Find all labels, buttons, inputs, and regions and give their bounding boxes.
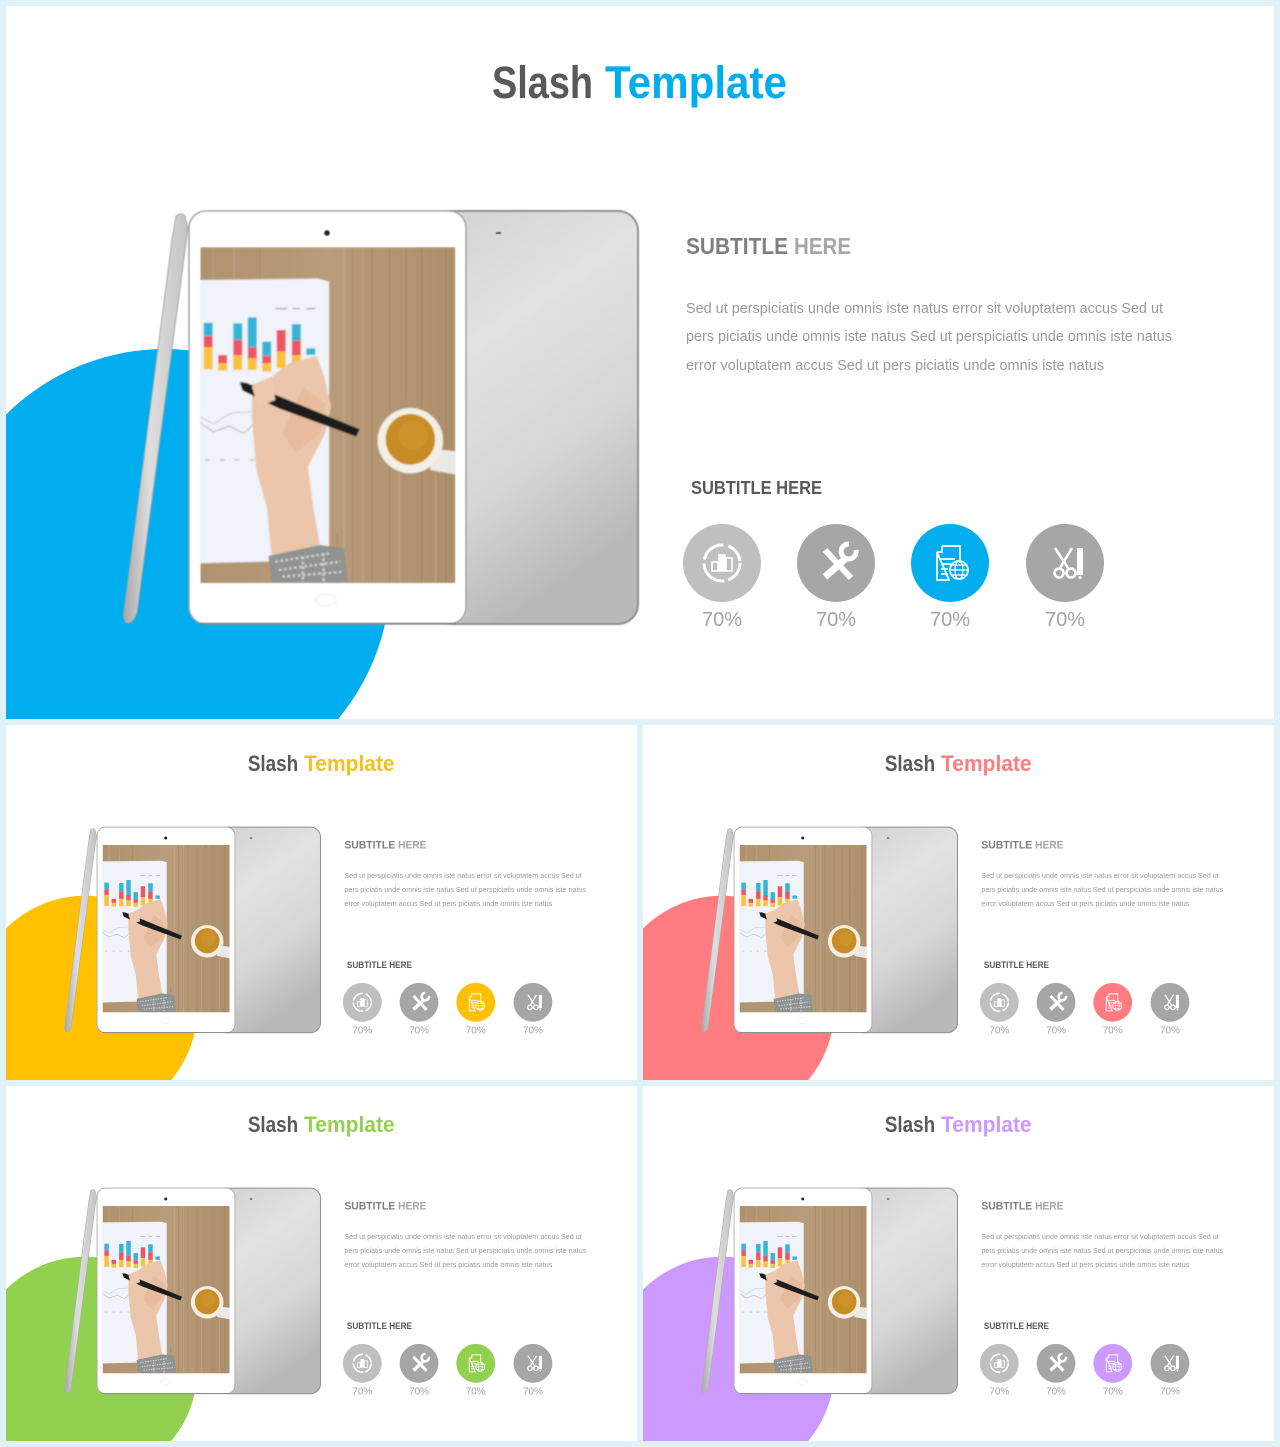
title: Template [941,751,1032,776]
body text: error voluptatem accus Sed ut pers piciatis unde omnis iste natus [344,1260,553,1269]
body text: Sed ut perspiciatis unde omnis iste natus error sit voluptatem accus Sed ut [344,1232,583,1241]
second subtitle: SUBTITLE HERE [691,478,822,498]
icon: tools 70%: 70% [409,1387,429,1398]
title [885,751,1032,776]
body text: Sed ut perspiciatis unde omnis iste natus error sit voluptatem accus Sed ut [686,300,1164,317]
icon: document 70% [1093,983,1132,1037]
title: Slash [885,1112,935,1137]
icon: scissors 70% [1151,983,1189,1037]
icon: tools 70% [400,983,438,1037]
icon: chart 70%: 70% [989,1026,1009,1037]
body text: pers piciatis unde omnis iste natus Sed ut perspiciatis unde omnis iste natus [344,885,586,894]
icon: document 70%: 70% [466,1026,486,1037]
subtitle heading: HERE [398,839,427,851]
subtitle heading: SUBTITLE [686,233,788,259]
title: Template [304,1112,395,1137]
body text [344,1232,586,1269]
body text [981,1232,1223,1269]
icon: scissors 70% [514,1344,552,1398]
icon: chart 70% [683,524,761,631]
body text [344,871,586,908]
body text: error voluptatem accus Sed ut pers piciatis unde omnis iste natus [686,357,1104,374]
subtitle heading: HERE [794,233,851,259]
body text: error voluptatem accus Sed ut pers piciatis unde omnis iste natus [981,899,1190,908]
icon: scissors 70% [1151,1344,1189,1398]
title: Template [605,57,787,108]
subtitle heading: HERE [398,1200,427,1212]
body text: pers piciatis unde omnis iste natus Sed ut perspiciatis unde omnis iste natus [686,328,1172,345]
icon: chart 70%: 70% [702,609,742,631]
subtitle heading [981,1200,1064,1212]
body text: pers piciatis unde omnis iste natus Sed ut perspiciatis unde omnis iste natus [344,1246,586,1255]
icon: document 70%: 70% [930,609,970,631]
body text [981,871,1223,908]
subtitle heading [686,233,851,259]
icon: scissors 70% [514,983,552,1037]
tablet mockup [65,827,320,1033]
blue circle shape [6,349,385,719]
panel: slide purple [610,1086,1274,1447]
icon: scissors 70%: 70% [523,1026,543,1037]
title: Slash [885,751,935,776]
subtitle heading: SUBTITLE [981,1200,1032,1212]
tablet mockup with chart photo [124,211,638,624]
icon: document 70% [911,524,989,631]
title [492,57,787,108]
body text: Sed ut perspiciatis unde omnis iste natus error sit voluptatem accus Sed ut [981,871,1220,880]
icon: tools 70%: 70% [1046,1026,1066,1037]
icon: chart 70%: 70% [352,1387,372,1398]
icon: chart 70% [980,983,1019,1037]
title: Slash [248,751,298,776]
coral circle shape [643,896,832,1080]
second subtitle: SUBTITLE HERE [347,1321,412,1331]
title [248,751,395,776]
icon: tools 70%: 70% [1046,1387,1066,1398]
second subtitle: SUBTITLE HERE [347,960,412,970]
icon: scissors 70%: 70% [523,1387,543,1398]
icon: scissors 70%: 70% [1160,1026,1180,1037]
body text: error voluptatem accus Sed ut pers piciatis unde omnis iste natus [344,899,553,908]
second subtitle: SUBTITLE HERE [984,1321,1049,1331]
subtitle heading [981,839,1064,851]
icon: document 70% [1093,1344,1132,1398]
icon: chart 70%: 70% [989,1387,1009,1398]
purple circle shape [643,1256,832,1441]
icon: document 70% [456,983,495,1037]
subtitle heading: SUBTITLE [344,1200,395,1212]
icon: tools 70% [1037,983,1075,1037]
subtitle heading [344,839,427,851]
subtitle heading: SUBTITLE [981,839,1032,851]
icon: document 70% [456,1344,495,1398]
title: Slash [492,57,593,108]
icon: scissors 70%: 70% [1045,609,1085,631]
body text: error voluptatem accus Sed ut pers piciatis unde omnis iste natus [981,1260,1190,1269]
body text: Sed ut perspiciatis unde omnis iste natus error sit voluptatem accus Sed ut [344,871,583,880]
icon: chart 70% [343,983,382,1037]
icon: tools 70% [797,524,875,631]
title: Template [941,1112,1032,1137]
panel: slide yellow [6,725,637,1080]
subtitle heading: HERE [1035,1200,1064,1212]
body text: pers piciatis unde omnis iste natus Sed ut perspiciatis unde omnis iste natus [981,1246,1223,1255]
panel: slide coral [643,725,1274,1080]
icon: tools 70%: 70% [409,1026,429,1037]
body text [686,300,1172,374]
icon: document 70%: 70% [466,1387,486,1398]
panel: main slide blue [6,6,1274,719]
title [248,1112,395,1137]
icon: scissors 70% [1026,524,1104,631]
icon: document 70%: 70% [1103,1026,1123,1037]
icon: chart 70% [980,1344,1019,1398]
body text: pers piciatis unde omnis iste natus Sed ut perspiciatis unde omnis iste natus [981,885,1223,894]
tablet mockup [702,827,957,1033]
icon: chart 70%: 70% [352,1026,372,1037]
body text: Sed ut perspiciatis unde omnis iste natus error sit voluptatem accus Sed ut [981,1232,1220,1241]
panel: slide green [0,1086,637,1447]
yellow circle shape [6,896,194,1080]
subtitle heading [344,1200,427,1212]
title: Template [304,751,395,776]
icon: tools 70% [400,1344,438,1398]
title: Slash [248,1112,298,1137]
icon: tools 70% [1037,1344,1075,1398]
green circle shape [0,1257,197,1447]
icon: chart 70% [343,1344,382,1398]
subtitle heading: SUBTITLE [344,839,395,851]
icon: tools 70%: 70% [816,609,856,631]
tablet mockup [65,1188,320,1394]
subtitle heading: HERE [1035,839,1064,851]
title [885,1112,1032,1137]
tablet mockup [702,1188,957,1394]
icon: scissors 70%: 70% [1160,1387,1180,1398]
icon: document 70%: 70% [1103,1387,1123,1398]
second subtitle: SUBTITLE HERE [984,960,1049,970]
